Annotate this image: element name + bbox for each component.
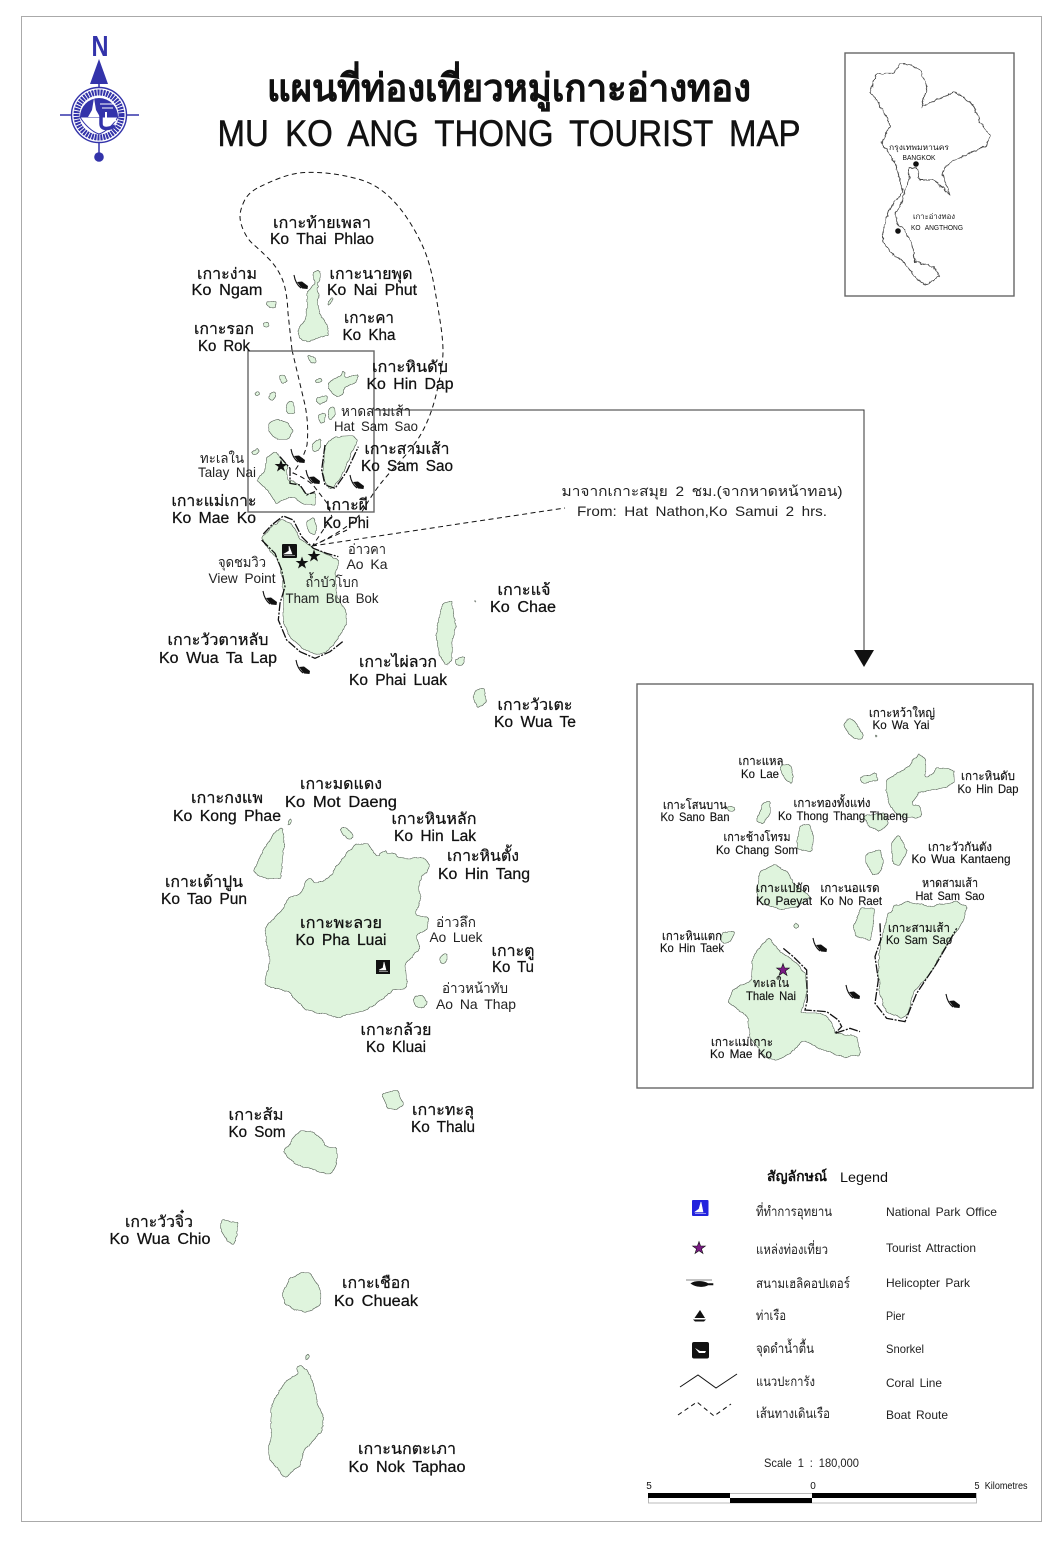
- label: Ko Tao Pun: [161, 874, 247, 908]
- legend row: pier: ท่าเรือ: [756, 1308, 786, 1323]
- snorkel icons: [263, 275, 364, 674]
- label: Ko Wua Ta Lap: Ko Wua Ta Lap: [159, 650, 277, 667]
- island: Ko Hin Dap: [887, 753, 954, 818]
- label: Ko Hin Dap: [366, 359, 454, 393]
- label: Ko Chueak: เกาะเชือก: [342, 1274, 410, 1292]
- label: Ko Sam Sao: Ko Sam Sao: [886, 933, 952, 947]
- label: Ko Sam Sao: [361, 441, 453, 475]
- label: Ko Kha: Ko Kha: [342, 327, 396, 344]
- label: Ko Lae: เกาะแหล: [738, 754, 784, 768]
- label: Hat Sam Sao: Hat Sam Sao: [916, 889, 985, 903]
- island: Ko Phai Luak: [436, 602, 456, 665]
- label: Ko Sam Sao: Ko Sam Sao: [361, 458, 453, 475]
- island: Ko Phi: [307, 518, 317, 535]
- boat routes: [240, 172, 565, 546]
- label: Ko Thai Phlao: Ko Thai Phlao: [270, 231, 374, 248]
- island: Ko Wua Te: [474, 688, 486, 708]
- label: Ko No Raet: [820, 881, 883, 908]
- label: Ao Na Thap: [436, 980, 516, 1012]
- label: Ko Mot Daeng: Ko Mot Daeng: [285, 794, 397, 811]
- inset snorkel icons: [813, 938, 960, 1008]
- label: Ko Wua Ta Lap: เกาะวัวตาหลับ: [168, 632, 268, 649]
- label: Ko Ngam: เกาะง่าม: [197, 266, 257, 283]
- island: Ko Sam Sao: [878, 902, 967, 1018]
- group: Ko Pha Luai islands: [254, 827, 447, 1017]
- label: Ko Sano Ban: [660, 798, 730, 824]
- label: Ko Nok Taphao: เกาะนกตะเภา: [358, 1441, 456, 1458]
- island: Ko Pha Luai: [265, 843, 430, 1017]
- label: Ko Hin Tang: [438, 844, 530, 883]
- label: Ko Thong Thang Thaeng: เกาะทองทั้งแท่ง: [794, 794, 870, 810]
- label: Ko Tu: [492, 943, 534, 976]
- title: แผนที่ท่องเที่ยวหมู่เกาะอ่างทอง: [267, 61, 751, 112]
- label: Ko Wua Te: เกาะวัวเตะ: [498, 697, 572, 714]
- Bangkok marker and label: BANGKOK: [902, 153, 936, 162]
- label: Ao Na Thap: Ao Na Thap: [436, 996, 516, 1012]
- island: Ko Thai Phlao: [297, 287, 329, 342]
- island: Ko Mae Ko: [257, 452, 315, 505]
- scale bar: 5: [646, 1481, 652, 1492]
- label: Hat Sam Sao: หาดสามเส้า: [341, 403, 411, 419]
- islands: southern group: [221, 1091, 403, 1477]
- main map labels: [110, 215, 842, 1476]
- label: View Point: จุดชมวิว: [218, 554, 266, 571]
- label: Ko Som: [228, 1107, 286, 1141]
- legend row: snorkel: [692, 1338, 924, 1358]
- group: islands in locator square: [252, 355, 477, 665]
- label: Ko Wua Kantaeng: [912, 840, 1010, 866]
- label: Talay Nai: [198, 450, 256, 480]
- panel: inset map: [637, 684, 1033, 1088]
- label: Tham Bua Bok: ถ้ำบัวโบก: [306, 572, 358, 590]
- label: Ko Hin Dap: [958, 769, 1019, 796]
- label: Ao Luek: [430, 914, 483, 945]
- label: Ko Kluai: [360, 1022, 432, 1056]
- label: Ko Paeyat: Ko Paeyat: [756, 894, 813, 908]
- label: Ko Rok: Ko Rok: [198, 338, 250, 355]
- compass and park emblem: [60, 31, 139, 162]
- islands: northern group: [263, 271, 333, 342]
- label: Talay Nai: Talay Nai: [198, 464, 256, 480]
- label: Ao Luek: อ่าวลึก: [436, 914, 476, 930]
- Ko Ang Thong marker and label: เกาะอ่างทอง: [913, 212, 955, 221]
- islands: central group: [288, 600, 486, 826]
- label: Ko No Raet: Ko No Raet: [820, 894, 883, 908]
- label: Ko Chae: เกาะแจ้: [498, 582, 550, 599]
- label: Ko Chae: Ko Chae: [490, 599, 556, 616]
- label: Ko Sano Ban: Ko Sano Ban: [660, 810, 730, 824]
- island: Ko Som: [284, 1131, 337, 1173]
- label: Ko Phai Luak: เกาะไผ่ลวก: [359, 653, 437, 671]
- label: Ko Paeyat: เกาะแปยัด: [756, 881, 810, 895]
- label: Ko Lae: Ko Lae: [741, 767, 779, 781]
- label: Ko Wua Te: [494, 697, 576, 731]
- label: Ko Mae Ko: เกาะแม่เกาะ: [172, 493, 256, 510]
- label: Ko Hin Dap: Ko Hin Dap: [366, 376, 454, 393]
- label: Ko Mot Daeng: [285, 776, 397, 811]
- label: Ko Wua Ta Lap: [159, 632, 277, 667]
- inset tourist star: [777, 964, 789, 976]
- legend heading: [767, 1168, 888, 1185]
- label: Ko Phai Luak: [349, 653, 447, 689]
- island: Ko Paeyat: [757, 865, 810, 909]
- label: Ko Thalu: เกาะทะลุ: [412, 1102, 474, 1120]
- label: Ko Hin Lak: Ko Hin Lak: [394, 828, 476, 845]
- island: Ko No Raet: [853, 908, 873, 940]
- panel: Thailand locator map: [845, 53, 1014, 296]
- label: Ko Mae Ko: [710, 1035, 773, 1061]
- label: Ko Lae: [738, 754, 784, 781]
- label: Ko Phi: [323, 497, 369, 532]
- label: Ko Wua Chio: เกาะวัวจิ๋ว: [125, 1209, 193, 1231]
- Bangkok marker and label: กรุงเทพมหานคร: [889, 143, 949, 152]
- label: Ko Kluai: เกาะกล้วย: [360, 1022, 432, 1039]
- legend row: coral line: Coral Line: [886, 1376, 942, 1390]
- legend row: national park office: ที่ทำการอุทยาน: [756, 1202, 832, 1220]
- label: Ko Sam Sao: [886, 921, 952, 947]
- label: Ko Nai Phut: เกาะนายพุด: [330, 266, 412, 284]
- label: Ko Wua Kantaeng: Ko Wua Kantaeng: [912, 852, 1010, 866]
- label: Ao Na Thap: อ่าวหน้าทับ: [442, 980, 508, 996]
- label: Ko Kong Phae: [173, 790, 281, 825]
- label: Ko Hin Dap: เกาะหินดับ: [961, 769, 1015, 783]
- label: Ko Kha: [342, 310, 396, 344]
- label: Ko Mae Ko: Ko Mae Ko: [710, 1047, 772, 1061]
- legend row: tourist attraction: [693, 1240, 976, 1257]
- label: Ao Luek: Ao Luek: [430, 929, 483, 945]
- label: Thale Nai: ทะเลใน: [753, 976, 789, 990]
- label: Ko Thalu: [411, 1102, 475, 1136]
- label: Ko Thalu: Ko Thalu: [411, 1119, 475, 1136]
- label: Ko Nok Taphao: Ko Nok Taphao: [348, 1459, 466, 1476]
- title: MU KO ANG THONG TOURIST MAP: [218, 113, 800, 154]
- label: Ko Kong Phae: Ko Kong Phae: [173, 808, 281, 825]
- label: Ko Hin Tang: เกาะหินตั้ง: [447, 844, 519, 865]
- label: Ko Thong Thang Thaeng: [778, 794, 908, 823]
- legend row: boat route: [678, 1402, 948, 1422]
- label: Tham Bua Bok: Tham Bua Bok: [286, 590, 379, 606]
- label: Ko Chang Som: Ko Chang Som: [716, 843, 798, 857]
- label: Thale Nai: [746, 976, 796, 1003]
- label: Ko Hin Dap: Ko Hin Dap: [958, 782, 1019, 796]
- label: Ko No Raet: เกาะนอแรด: [820, 881, 880, 895]
- label: Ao Ka: [346, 541, 388, 572]
- label: Ko Kong Phae: เกาะกงแพ: [191, 790, 263, 807]
- north letter: N: [92, 31, 108, 63]
- label: Ko Wua Chio: [110, 1209, 210, 1248]
- locator square and leader arrow: [248, 351, 874, 667]
- legend row: helicopter park: Helicopter Park: [886, 1276, 971, 1290]
- inset labels: [660, 706, 1019, 1061]
- title: [218, 61, 800, 154]
- label: Ko Hin Taek: เกาะหินแตก: [662, 929, 722, 943]
- island: Ko Nok Taphao: [268, 1370, 323, 1477]
- label: Ko Paeyat: [756, 881, 813, 908]
- label: Ko Nai Phut: [327, 266, 418, 299]
- callout: ferry route from Ko Samui: [562, 483, 842, 519]
- island: Ko Kluai: [413, 995, 427, 1008]
- label: Ko Pha Luai: [296, 915, 386, 949]
- label: Ko Nai Phut: Ko Nai Phut: [327, 282, 418, 299]
- label: Ko Chae: [490, 582, 556, 616]
- label: Ko Chang Som: เกาะช้างโทรม: [724, 830, 790, 844]
- label: Ko Wa Yai: Ko Wa Yai: [872, 718, 930, 732]
- label: Ao Ka: Ao Ka: [346, 556, 388, 572]
- island: Ko Tu: [440, 953, 447, 964]
- label: Ko Ngam: Ko Ngam: [192, 282, 262, 299]
- label: Ko Tao Pun: เกาะเต้าปูน: [165, 874, 243, 892]
- island: Ko Wua Chio: [221, 1220, 237, 1246]
- label: Ko Mot Daeng: เกาะมดแดง: [300, 776, 382, 793]
- legend row: coral line: แนวปะการัง: [756, 1374, 815, 1389]
- label: Ko Hin Lak: [392, 811, 476, 845]
- callout: ferry route from Ko Samui: มาจากเกาะสมุย 2 ชม.(จากหาดหน้าทอน): [562, 483, 842, 500]
- label: Ko Sam Sao: เกาะสามเส้า: [888, 921, 950, 935]
- island: Ko Thalu: [382, 1091, 403, 1109]
- label: Ko Phi: เกาะผี: [326, 497, 368, 514]
- label: Ko Thong Thang Thaeng: Ko Thong Thang Thaeng: [778, 809, 908, 823]
- legend row: national park office: National Park Office: [886, 1205, 997, 1219]
- legend row: pier: Pier: [886, 1309, 905, 1323]
- label: Ko Wa Yai: เกาะหว้าใหญ่: [869, 706, 935, 720]
- label: Ko Phi: Ko Phi: [323, 515, 369, 532]
- scale bar: 5 Kilometres: [974, 1481, 1028, 1492]
- label: Ko Chueak: Ko Chueak: [334, 1293, 418, 1310]
- legend heading: Legend: [840, 1170, 888, 1185]
- coral lines: northern group: [262, 445, 358, 658]
- label: Ko Nok Taphao: [348, 1441, 466, 1476]
- label: Ko Hin Dap: เกาะหินดับ: [372, 359, 448, 376]
- label: Ko Phai Luak: Ko Phai Luak: [349, 672, 447, 689]
- label: Ko Mae Ko: Ko Mae Ko: [172, 510, 256, 527]
- label: View Point: [208, 554, 276, 586]
- park emblem: [72, 88, 126, 142]
- Thailand outline: [870, 63, 990, 285]
- legend row: tourist attraction: แหล่งท่องเที่ยว: [756, 1240, 828, 1257]
- label: Ko Wua Chio: Ko Wua Chio: [110, 1231, 210, 1248]
- legend row: national park office: [692, 1200, 997, 1220]
- label: Ko Chueak: [334, 1274, 418, 1310]
- label: Ko Wa Yai: [869, 706, 935, 732]
- label: Ko Wua Kantaeng: เกาะวัวกันตัง: [928, 840, 992, 854]
- legend row: pier: [693, 1308, 905, 1323]
- label: Ko Thai Phlao: [270, 215, 374, 248]
- legend row: snorkel: Snorkel: [886, 1342, 924, 1356]
- label: Ko Pha Luai: Ko Pha Luai: [296, 932, 386, 949]
- island: Ko Kong Phae: [254, 827, 284, 878]
- legend row: coral line: [680, 1374, 942, 1390]
- island: Ko Wua Ta Lap: [262, 520, 347, 655]
- label: Ko Tu: Ko Tu: [492, 959, 534, 976]
- island: Ko Mae Ko: [728, 938, 860, 1060]
- label: Ko Rok: [194, 321, 254, 355]
- national park office icon: Ko Wua Ta Lap: [282, 544, 297, 558]
- inset islands: [720, 718, 967, 1060]
- label: Hat Sam Sao: [916, 876, 985, 903]
- label: Ko Hin Lak: เกาะหินหลัก: [392, 811, 476, 828]
- island: Ko Sam Sao: [323, 436, 357, 488]
- island: Ko Chueak: [283, 1273, 320, 1312]
- legend heading: สัญลักษณ์: [767, 1168, 827, 1185]
- legend row: snorkel: จุดดำน้ำตื้น: [756, 1338, 814, 1357]
- legend row: helicopter park: สนามเฮลิคอปเตอร์: [756, 1275, 850, 1291]
- label: Ko Tao Pun: Ko Tao Pun: [161, 891, 247, 908]
- label: Ko Som: Ko Som: [228, 1124, 286, 1141]
- legend row: boat route: Boat Route: [886, 1408, 948, 1422]
- label: Ko Hin Taek: Ko Hin Taek: [660, 941, 725, 955]
- label: Ko Som: เกาะส้ม: [228, 1107, 284, 1124]
- label: Ko Sam Sao: เกาะสามเส้า: [364, 441, 450, 458]
- label: Ko Sano Ban: เกาะโสนบาน: [663, 798, 727, 812]
- label: Ko Hin Taek: [660, 929, 725, 955]
- legend row: helicopter park: [686, 1275, 971, 1291]
- label: Ko Ngam: [192, 266, 262, 299]
- legend row: boat route: เส้นทางเดินเรือ: [756, 1406, 830, 1421]
- label: Ao Ka: อ่าวคา: [348, 541, 386, 557]
- label: Ko Kluai: Ko Kluai: [366, 1039, 426, 1056]
- national park office icon: Ko Pha Luai: [376, 960, 390, 974]
- label: Ko Pha Luai: เกาะพะลวย: [300, 915, 382, 932]
- label: Hat Sam Sao: Hat Sam Sao: [334, 418, 418, 434]
- island: Ko Hin Dap: [328, 370, 358, 397]
- compass arrow: [90, 59, 108, 84]
- attraction stars: [275, 460, 320, 568]
- Bangkok marker and label: [889, 143, 949, 167]
- scale bar: 0: [810, 1481, 816, 1492]
- legend row: tourist attraction: Tourist Attraction: [886, 1241, 976, 1255]
- label: Thale Nai: Thale Nai: [746, 989, 796, 1003]
- inset coral lines: [783, 923, 957, 1033]
- Ko Ang Thong marker and label: KO ANGTHONG: [911, 223, 963, 232]
- scale bar: Scale 1 : 180,000: [764, 1456, 859, 1470]
- label: Ko Kha: เกาะคา: [344, 310, 394, 327]
- label: Ko Thai Phlao: เกาะท้ายเพลา: [273, 215, 371, 232]
- Ko Ang Thong marker and label: [895, 212, 963, 234]
- label: Ko Wua Te: Ko Wua Te: [494, 714, 576, 731]
- label: Ko Rok: เกาะรอก: [194, 321, 254, 338]
- label: Tham Bua Bok: [286, 572, 379, 606]
- label: Ko Mae Ko: เกาะแม่เกาะ: [711, 1035, 773, 1049]
- label: Hat Sam Sao: [334, 403, 418, 434]
- label: Ko Mae Ko: [172, 493, 256, 527]
- scale bar: [646, 1456, 1028, 1503]
- label: Ko Hin Tang: Ko Hin Tang: [438, 866, 530, 883]
- panel: legend: [678, 1168, 997, 1422]
- label: Hat Sam Sao: หาดสามเส้า: [922, 876, 978, 890]
- label: Ko Tu: เกาะตู: [492, 943, 534, 961]
- callout: ferry route from Ko Samui: From: Hat Nathon,Ko Samui 2 hrs.: [577, 503, 827, 519]
- label: View Point: View Point: [208, 570, 276, 586]
- label: Talay Nai: ทะเลใน: [200, 450, 244, 466]
- label: Ko Chang Som: [716, 830, 798, 857]
